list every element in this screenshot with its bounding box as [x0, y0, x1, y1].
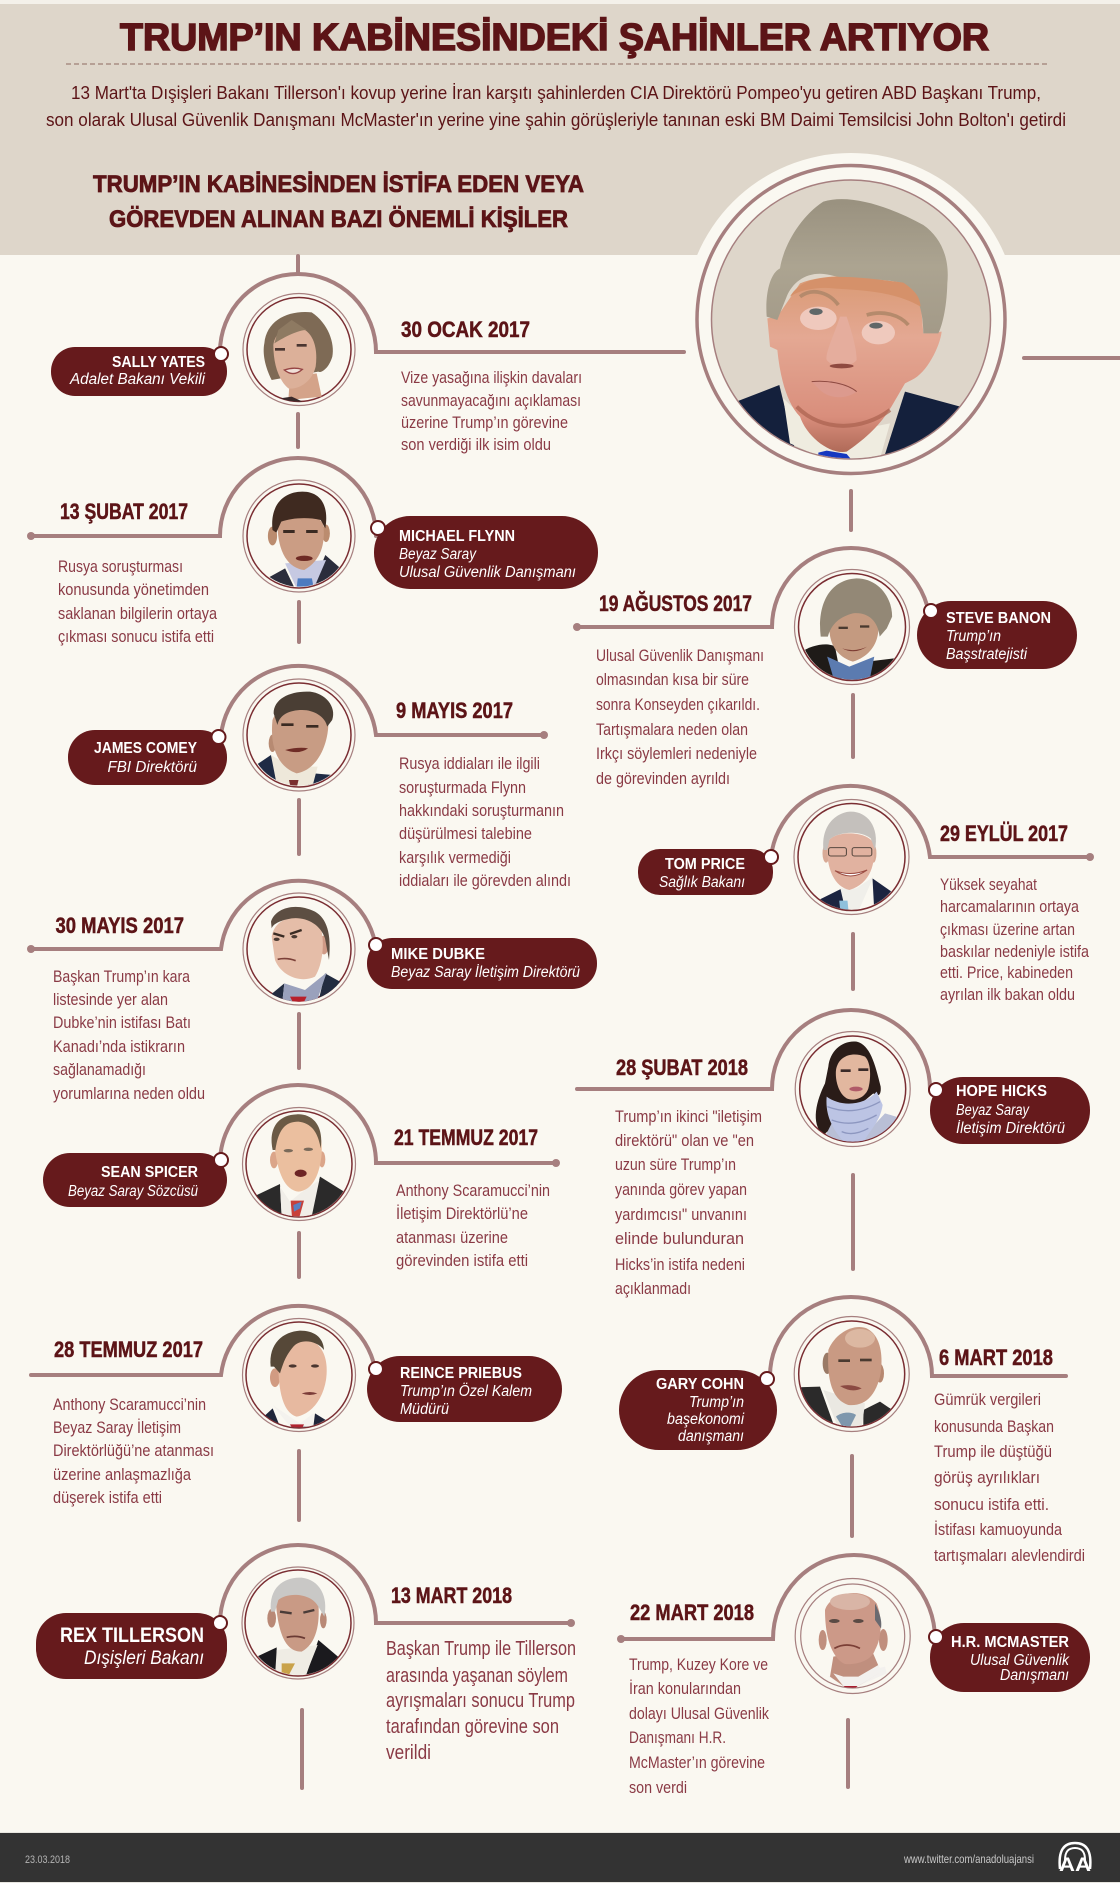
description: üzerine Trump’ın görevine: [401, 413, 568, 432]
name pill: [367, 1356, 562, 1422]
description: direktörü" olan ve "en: [615, 1131, 754, 1150]
name pill: Adalet Bakanı Vekili: [69, 371, 206, 388]
description: Hicks’in istifa nedeni: [615, 1255, 745, 1274]
entry: Sean Spicer: [43, 1085, 560, 1277]
description: Yüksek seyahat: [940, 875, 1037, 894]
description: harcamalarının ortaya: [940, 897, 1079, 916]
description: yorumlarına neden oldu: [53, 1084, 205, 1103]
description: çıkması üzerine artan: [940, 920, 1075, 939]
name pill: SALLY YATES: [112, 354, 205, 371]
description: elinde bulunduran: [615, 1229, 744, 1248]
subheading: [93, 171, 584, 233]
description: savunmayacağını açıklaması: [401, 391, 581, 410]
description: Rusya soruşturması: [58, 557, 183, 576]
name pill: JAMES COMEY: [94, 740, 197, 757]
description: Anthony Scaramucci’nin: [53, 1395, 206, 1414]
entry: Sally Yates: [51, 274, 684, 454]
arc and line: [621, 1555, 935, 1639]
description: [615, 1107, 762, 1298]
description: saklanan bilgilerin ortaya: [58, 604, 217, 623]
description: İletişim Direktörlü’ne: [396, 1204, 528, 1223]
photo: H.R. McMaster: [795, 1578, 910, 1694]
description: konusunda yönetimden: [58, 580, 209, 599]
description: görüş ayrılıkları: [934, 1468, 1040, 1487]
subheading: GÖREVDEN ALINAN BAZI ÖNEMLİ KİŞİLER: [109, 206, 568, 233]
name pill: [36, 1613, 227, 1679]
description: ayrışmaları sonucu Trump: [386, 1690, 575, 1712]
name pill: REINCE PRIEBUS: [400, 1365, 522, 1382]
description: Tartışmalara neden olan: [596, 720, 748, 739]
date: 19 AĞUSTOS 2017: [599, 591, 752, 616]
arc and line: [220, 1085, 556, 1163]
description: uzun süre Trump’ın: [615, 1155, 736, 1174]
description: Kanadı’nda istikrarın: [53, 1037, 185, 1056]
description: Başkan Trump ile Tillerson: [386, 1638, 576, 1660]
connector: [297, 1451, 301, 1520]
description: etti. Price, kabineden: [940, 963, 1073, 982]
description: sağlanamadığı: [53, 1060, 146, 1079]
date: 22 MART 2018: [630, 1600, 754, 1625]
arc and line: [31, 1306, 376, 1375]
connector: [297, 1233, 301, 1277]
description: Danışmanı H.R.: [629, 1728, 726, 1747]
description: baskılar nedeniyle istifa: [940, 942, 1089, 961]
entry: Rex Tillerson: [36, 1545, 576, 1788]
name pill: MIKE DUBKE: [391, 946, 485, 963]
description: [58, 557, 217, 646]
entry: Steve Banon: [573, 548, 1077, 788]
date: 29 EYLÜL 2017: [940, 821, 1068, 846]
name pill: Beyaz Saray: [956, 1102, 1030, 1119]
photo: Michael Flynn: [243, 480, 355, 593]
name pill: Trump’ın: [689, 1394, 744, 1411]
date: 9 MAYIS 2017: [396, 698, 513, 723]
date: 30 MAYIS 2017: [56, 913, 184, 938]
name pill: GARY COHN: [656, 1376, 744, 1393]
name pill: Beyaz Saray: [399, 546, 477, 563]
subheading: TRUMP’IN KABİNESİNDEN İSTİFA EDEN VEYA: [93, 171, 584, 198]
icon: Anadolu Agency logo: [1059, 1843, 1091, 1876]
arc and line: [220, 274, 684, 352]
description: verildi: [386, 1742, 431, 1764]
date: 6 MART 2018: [939, 1345, 1053, 1370]
description: üzerine anlaşmazlığa: [53, 1465, 191, 1484]
photo: Gary Cohn: [794, 1316, 909, 1433]
footer url: www.twitter.com/anadoluajansi: [903, 1852, 1034, 1866]
description: hakkındaki soruşturmanın: [399, 801, 564, 820]
description: [386, 1638, 576, 1764]
name pill: Beyaz Saray Sözcüsü: [68, 1183, 198, 1200]
description: ayrılan ilk bakan oldu: [940, 985, 1075, 1004]
icon: Anadolu Agency logo: AA: [1059, 1855, 1091, 1876]
name pill: Müdürü: [400, 1401, 449, 1418]
arc and line: [577, 1010, 930, 1089]
description: [53, 967, 205, 1103]
description: [401, 368, 582, 454]
entry: Reince Priebus: [31, 1306, 562, 1520]
name pill: Trump’ın: [946, 628, 1001, 645]
arc and line: [221, 666, 544, 735]
header band: [0, 0, 1120, 255]
description: de görevinden ayrıldı: [596, 769, 730, 788]
intro text: 13 Mart'ta Dışişleri Bakanı Tillerson'ı kovup yerine İran karşıtı şahinlerden CIA Direktörü Pompeo'yu getiren ABD Başkanı Trump,: [71, 82, 1041, 103]
photo: Hope Hicks: [795, 1032, 910, 1150]
photo: Sally Yates: [243, 294, 355, 406]
intro text: [46, 82, 1066, 130]
description: görevinden istifa etti: [396, 1251, 528, 1270]
description: Rusya iddiaları ile ilgili: [399, 754, 540, 773]
intro text: son olarak Ulusal Güvenlik Danışmanı McMaster'ın yerine yine şahin görüşleriyle tanınan eski BM Daimi Temsilcisi John Bolton'ı getirdi: [46, 109, 1066, 130]
photo: Rex Tillerson: [242, 1567, 354, 1679]
name pill: REX TILLERSON: [60, 1624, 204, 1647]
name pill: danışmanı: [678, 1428, 744, 1445]
description: tartışmaları alevlendirdi: [934, 1546, 1085, 1565]
description: İran konularından: [629, 1679, 741, 1698]
arc and line: [770, 1297, 1066, 1376]
arc and line: [31, 881, 376, 949]
description: dolayı Ulusal Güvenlik: [629, 1704, 769, 1723]
description: düşürülmesi talebine: [399, 824, 532, 843]
description: sonra Konseyden çıkarıldı.: [596, 695, 760, 714]
name pill: Sağlık Bakanı: [659, 874, 745, 891]
description: yardımcısı" unvanını: [615, 1205, 747, 1224]
description: çıkması sonucu istifa etti: [58, 627, 214, 646]
connector: [297, 800, 301, 854]
connector: top of right timeline: [849, 491, 853, 530]
description: [596, 646, 764, 788]
arc and line: [220, 1545, 569, 1623]
name pill: Dışişleri Bakanı: [84, 1648, 204, 1669]
photo: Sean Spicer: [242, 1108, 356, 1220]
portrait: Donald Trump: [684, 153, 1018, 487]
description: Beyaz Saray İletişim: [53, 1418, 181, 1437]
photo: James Comey: [243, 679, 355, 791]
description: Trump, Kuzey Kore ve: [629, 1655, 768, 1674]
name pill: [929, 1077, 1090, 1144]
description: Trump’ın ikinci "iletişim: [615, 1107, 762, 1126]
description: [940, 875, 1089, 1004]
name pill: [367, 938, 597, 989]
name pill: [43, 1153, 228, 1207]
name pill: STEVE BANON: [946, 610, 1051, 627]
description: Direktörlüğü’ne atanması: [53, 1441, 214, 1460]
photo: Tom Price: [794, 800, 909, 915]
name pill: [619, 1370, 777, 1450]
title: TRUMP’IN KABİNESİNDEKİ ŞAHİNLER ARTIYOR: [120, 17, 989, 59]
description: Başkan Trump’ın kara: [53, 967, 190, 986]
description: [399, 754, 571, 890]
date: 30 OCAK 2017: [401, 317, 530, 342]
connector: [850, 1456, 854, 1536]
description: Dubke’nin istifası Batı: [53, 1013, 191, 1032]
name pill: MICHAEL FLYNN: [399, 528, 515, 545]
entry: H.R. McMaster: [617, 1555, 1090, 1797]
description: son verdiği ilk isim oldu: [401, 435, 551, 454]
name pill: TOM PRICE: [665, 856, 745, 873]
description: arasında yaşanan söylem: [386, 1665, 568, 1687]
name pill: Trump’ın Özel Kalem: [400, 1382, 532, 1400]
description: olmasından kısa bir süre: [596, 670, 749, 689]
connector: [851, 934, 855, 989]
name pill: [929, 1623, 1090, 1692]
description: açıklanmadı: [615, 1279, 691, 1298]
description: konusunda Başkan: [934, 1417, 1054, 1436]
entry: Michael Flynn: [27, 458, 598, 646]
connector: [846, 1720, 850, 1787]
description: [629, 1655, 769, 1797]
description: sonucu istifa etti.: [934, 1495, 1049, 1514]
description: Vize yasağına ilişkin davaları: [401, 368, 582, 387]
name pill: Başstratejisti: [946, 646, 1028, 663]
arc and line: [771, 786, 1090, 857]
name pill: Danışmanı: [1000, 1667, 1069, 1684]
description: iddiaları ile görevden alındı: [399, 871, 571, 890]
name pill: başekonomi: [667, 1411, 745, 1428]
photo: Steve Banon: [794, 570, 910, 684]
name pill: H.R. MCMASTER: [951, 1634, 1069, 1651]
name pill: [638, 849, 778, 895]
connector: [297, 1014, 301, 1068]
name pill: HOPE HICKS: [956, 1083, 1047, 1100]
description: Trump ile düştüğü: [934, 1442, 1052, 1461]
connector: top of left timeline: [296, 256, 300, 272]
line: Trump right connector: [1024, 356, 1120, 360]
name pill: SEAN SPICER: [101, 1164, 198, 1181]
description: Ulusal Güvenlik Danışmanı: [596, 646, 764, 665]
name pill: İletişim Direktörü: [956, 1120, 1065, 1137]
description: düşerek istifa etti: [53, 1488, 162, 1507]
description: [396, 1181, 550, 1270]
connector: [296, 414, 300, 447]
description: soruşturmada Flynn: [399, 778, 526, 797]
description: Irkçı söylemleri nedeniyle: [596, 744, 757, 763]
description: [53, 1395, 214, 1507]
entry: Mike Dubke: [27, 881, 597, 1103]
entry: Hope Hicks: [577, 1010, 1090, 1298]
description: son verdi: [629, 1778, 687, 1797]
name pill: [371, 516, 598, 589]
arc and line: [31, 458, 376, 536]
date: 28 TEMMUZ 2017: [54, 1337, 203, 1362]
description: tarafından görevine son: [386, 1716, 559, 1738]
name pill: [51, 347, 228, 396]
connector: [300, 1710, 304, 1788]
description: atanması üzerine: [396, 1228, 508, 1247]
description: Gümrük vergileri: [934, 1390, 1041, 1409]
photo: Reince Priebus: [242, 1318, 356, 1432]
description: listesinde yer alan: [53, 990, 168, 1009]
name pill: [68, 730, 227, 785]
description: McMaster’ın görevine: [629, 1753, 765, 1772]
name pill: Beyaz Saray İletişim Direktörü: [391, 964, 580, 981]
connector: [297, 602, 301, 642]
entry: Gary Cohn: [619, 1297, 1085, 1565]
photo: Mike Dubke: [243, 893, 355, 1008]
connector: [851, 695, 855, 757]
name pill: FBI Direktörü: [108, 759, 197, 776]
description: yanında görev yapan: [615, 1180, 747, 1199]
description: karşılık vermediği: [399, 848, 511, 867]
connector: [851, 1175, 855, 1269]
description: [934, 1390, 1085, 1565]
name pill: Ulusal Güvenlik Danışmanı: [399, 564, 576, 581]
arc and line: [577, 548, 930, 627]
entry: James Comey: [68, 666, 571, 890]
description: İstifası kamuoyunda: [934, 1520, 1062, 1539]
date: 21 TEMMUZ 2017: [394, 1125, 538, 1150]
date: 28 ŞUBAT 2018: [616, 1055, 748, 1080]
description: Anthony Scaramucci’nin: [396, 1181, 550, 1200]
date: 13 ŞUBAT 2017: [60, 499, 188, 524]
footer: [0, 1832, 1120, 1883]
name pill: [917, 601, 1077, 669]
date: 13 MART 2018: [391, 1583, 512, 1608]
name pill: Ulusal Güvenlik: [970, 1652, 1070, 1669]
entry: Tom Price: [638, 786, 1094, 1004]
footer date: 23.03.2018: [25, 1854, 70, 1866]
